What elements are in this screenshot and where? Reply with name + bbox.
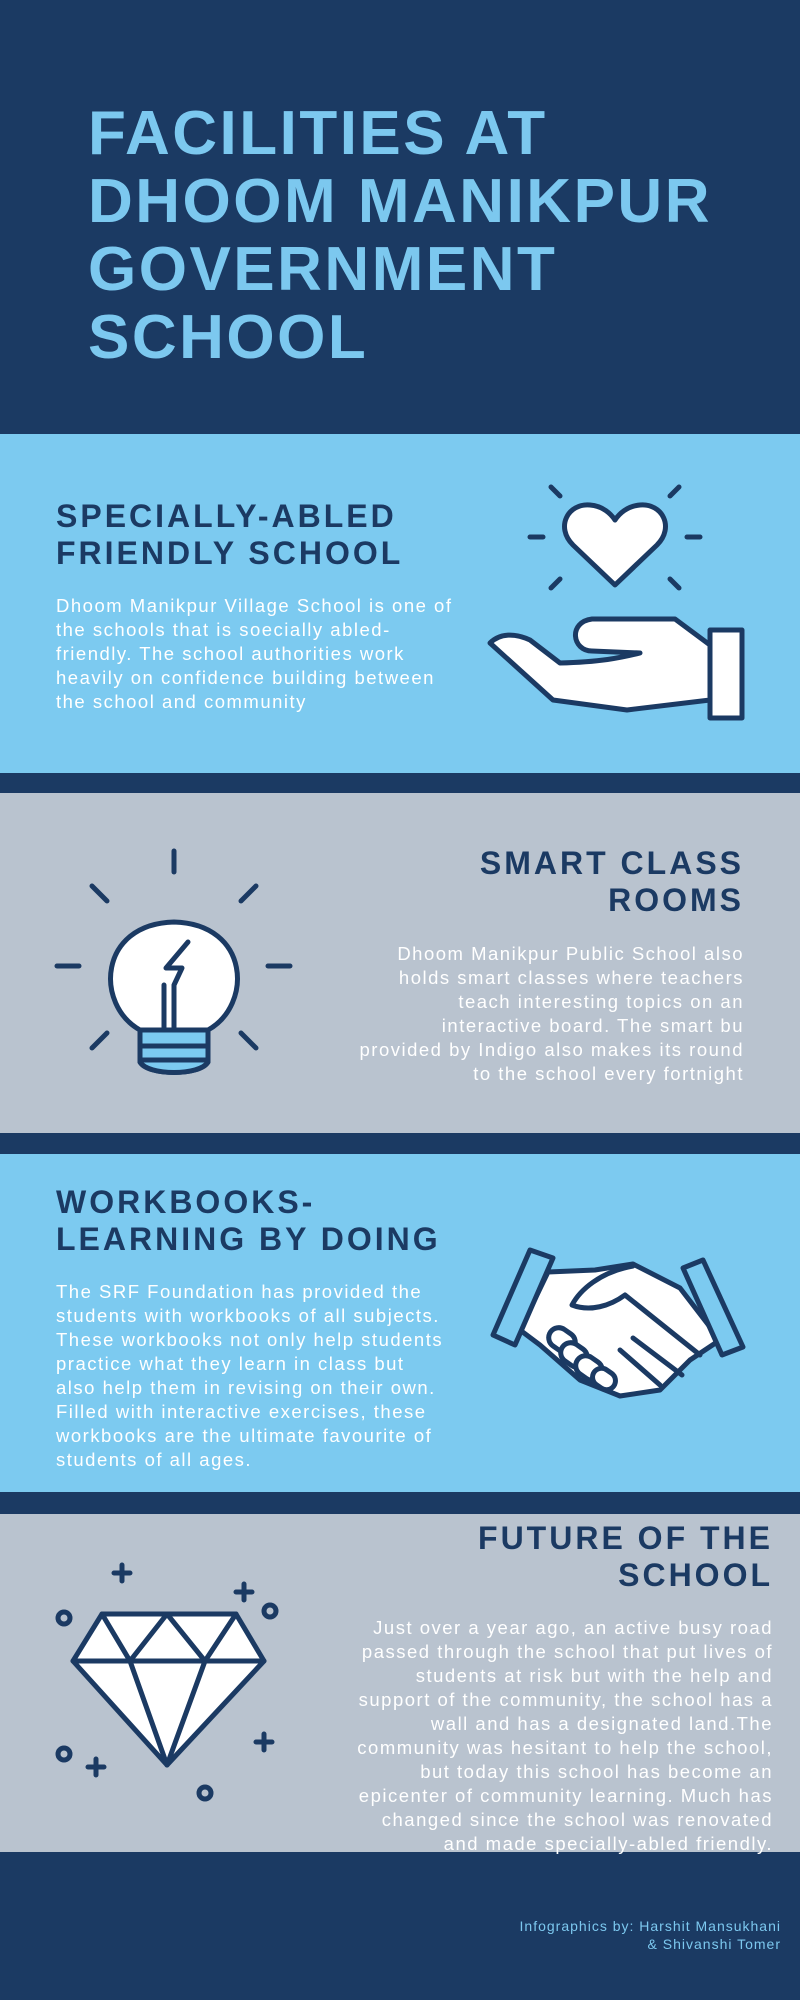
heading: future bbox=[478, 1520, 773, 1593]
text: specially-abled bbox=[56, 595, 452, 712]
heading: specially-abled bbox=[56, 498, 403, 571]
heading: future: FUTURE OF THE bbox=[478, 1520, 773, 1556]
text: future: Just over a year ago, an active busy road bbox=[373, 1617, 773, 1638]
text: future: students at risk but with the help and bbox=[416, 1665, 773, 1686]
text: future: support of the community, the school has a bbox=[359, 1689, 773, 1710]
heading: workbooks bbox=[56, 1184, 441, 1257]
title bbox=[88, 99, 712, 372]
heading: specially-abled: SPECIALLY-ABLED bbox=[56, 498, 397, 534]
text: workbooks: These workbooks not only help students bbox=[56, 1329, 443, 1350]
text: workbooks: workbooks are the ultimate favourite of bbox=[56, 1425, 432, 1446]
text: specially-abled: friendly. The school authorities work bbox=[56, 643, 405, 664]
heading: workbooks: LEARNING BY DOING bbox=[56, 1221, 441, 1257]
text: specially-abled: the schools that is soecially abled- bbox=[56, 619, 391, 640]
heading: smart class bbox=[480, 845, 744, 918]
text: workbooks: students of all ages. bbox=[56, 1449, 252, 1470]
text: future: but today this school has become an bbox=[420, 1761, 773, 1782]
text: future: and made specially-abled friendly. bbox=[444, 1833, 773, 1854]
icon: diamond bbox=[58, 1565, 276, 1799]
text: smart class: teach interesting topics on an bbox=[458, 991, 744, 1012]
panel: future bbox=[0, 1514, 800, 1852]
text: workbooks: also help them in revising on their own. bbox=[56, 1377, 436, 1398]
text: workbooks: students with workbooks of all subjects. bbox=[56, 1305, 440, 1326]
credits bbox=[520, 1918, 781, 1952]
heading: specially-abled: FRIENDLY SCHOOL bbox=[56, 535, 403, 571]
heading: future: SCHOOL bbox=[618, 1557, 773, 1593]
text: workbooks: Filled with interactive exercises, these bbox=[56, 1401, 427, 1422]
text: future: changed since the school was renovated bbox=[382, 1809, 773, 1830]
panel: smart class bbox=[0, 793, 800, 1133]
text: future: passed through the school that put lives of bbox=[362, 1641, 773, 1662]
text: specially-abled: Dhoom Manikpur Village School is one of bbox=[56, 595, 452, 616]
band: header bbox=[0, 0, 800, 434]
credits: & Shivanshi Tomer bbox=[648, 1936, 781, 1952]
title: FACILITIES AT bbox=[88, 99, 548, 168]
icon: light bulb bbox=[57, 851, 290, 1072]
heading: workbooks: WORKBOOKS- bbox=[56, 1184, 315, 1220]
text: workbooks: The SRF Foundation has provided the bbox=[56, 1281, 422, 1302]
text: smart class: provided by Indigo also makes its round bbox=[360, 1039, 744, 1060]
icon: heart in hand bbox=[490, 487, 742, 718]
heading: smart class: SMART CLASS bbox=[480, 845, 744, 881]
icon: handshake bbox=[493, 1250, 743, 1396]
text: future bbox=[357, 1617, 773, 1854]
text: future: wall and has a designated land.The bbox=[431, 1713, 773, 1734]
text: future: epicenter of community learning. Much has bbox=[359, 1785, 773, 1806]
text: smart class: interactive board. The smart bu bbox=[442, 1015, 744, 1036]
panel: specially-abled bbox=[0, 434, 800, 773]
title: DHOOM MANIKPUR bbox=[88, 167, 712, 236]
title: SCHOOL bbox=[88, 303, 368, 372]
panel: workbooks bbox=[0, 1154, 800, 1492]
text: smart class: holds smart classes where teachers bbox=[399, 967, 744, 988]
credits: Infographics by: Harshit Mansukhani bbox=[520, 1918, 781, 1934]
title: GOVERNMENT bbox=[88, 235, 557, 304]
text: smart class bbox=[360, 943, 744, 1084]
text: workbooks bbox=[56, 1281, 443, 1470]
text: specially-abled: the school and community bbox=[56, 691, 307, 712]
text: specially-abled: heavily on confidence building between bbox=[56, 667, 435, 688]
text: smart class: to the school every fortnight bbox=[473, 1063, 744, 1084]
text: future: community was hesitant to help the school, bbox=[357, 1737, 773, 1758]
text: smart class: Dhoom Manikpur Public School also bbox=[397, 943, 744, 964]
text: workbooks: practice what they learn in class but bbox=[56, 1353, 405, 1374]
heading: smart class: ROOMS bbox=[608, 882, 744, 918]
